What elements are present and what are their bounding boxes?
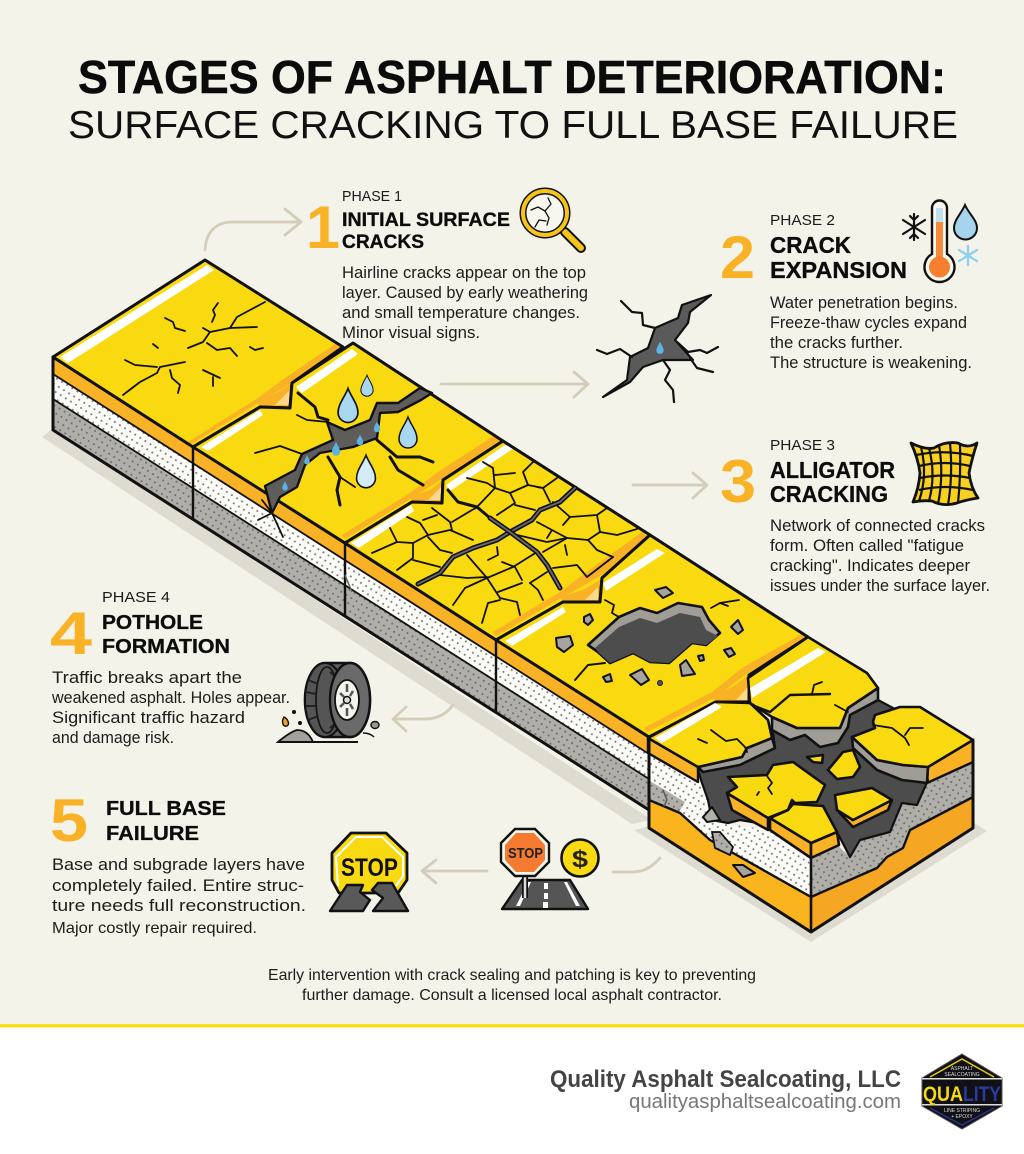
phase 5 text: Major costly repair required. <box>52 920 257 937</box>
phase 2 text <box>770 293 972 372</box>
logo: LINE STRIPING <box>944 1108 980 1114</box>
asphalt road cross-section illustration <box>42 260 987 942</box>
footer <box>0 1024 1024 1154</box>
phase 4 heading: POTHOLE <box>102 612 203 634</box>
title: SURFACE CRACKING TO FULL BASE FAILURE <box>68 104 958 147</box>
phase 4 heading <box>102 589 230 658</box>
phase 1 text: Hairline cracks appear on the top <box>342 263 586 282</box>
logo: LITY <box>963 1083 1001 1106</box>
stage 2 surface: wide crack with water <box>193 343 503 543</box>
icon: tire with debris <box>278 663 379 742</box>
phase 3 text: Network of connected cracks <box>770 516 985 535</box>
icon: cracked stop sign: STOP <box>341 854 398 882</box>
phase 4 text: Traffic breaks apart the <box>52 668 242 687</box>
phase 1 heading: INITIAL SURFACE <box>342 210 510 231</box>
title <box>68 51 958 147</box>
closing note: further damage. Consult a licensed local asphalt contractor. <box>302 987 722 1004</box>
exposed base <box>698 700 928 857</box>
phase 3 heading: CRACKING <box>770 481 888 507</box>
logo: ASPHALT <box>951 1066 973 1072</box>
phase 2 text: The structure is weakening. <box>770 353 972 372</box>
icon: stop sign, road and dollar coin: $ <box>572 846 589 873</box>
road shadow <box>42 428 987 942</box>
closing note: Early intervention with crack sealing and patching is key to preventing <box>268 967 756 984</box>
phase 1 text: and small temperature changes. <box>342 303 580 322</box>
number 5: 5 <box>50 787 88 854</box>
phase 2 heading: CRACK <box>770 232 851 258</box>
phase 1 text <box>342 263 588 342</box>
arrow: stage 2 to crack detail <box>441 372 588 397</box>
phase 2 heading <box>770 212 907 283</box>
phase 3 heading: PHASE 3 <box>770 437 835 454</box>
phase 2 text: Water penetration begins. <box>770 293 958 312</box>
icon: magnifying glass <box>523 191 581 248</box>
panel: phase 2 <box>720 201 977 372</box>
panel: phase 3 <box>720 437 990 595</box>
icon: water drops on surface <box>282 375 417 490</box>
phase 5 text <box>52 855 306 937</box>
phase 4 text: weakened asphalt. Holes appear. <box>51 688 290 707</box>
phase 4 text <box>51 668 290 747</box>
phase 2 heading: EXPANSION <box>770 257 907 283</box>
wide cracks <box>418 488 575 588</box>
icon: cracked stop sign <box>330 833 408 911</box>
phase 2 text: the cracks further. <box>770 333 903 352</box>
block faces <box>648 738 973 932</box>
phase 1 heading: PHASE 1 <box>342 188 402 205</box>
phase 2 heading: PHASE 2 <box>770 212 835 229</box>
arrow: block to cost icons <box>613 858 660 872</box>
arrow: stage 4 to phase 4 <box>393 705 453 731</box>
thin crack network <box>372 462 637 623</box>
title: STAGES OF ASPHALT DETERIORATION: <box>78 51 946 103</box>
pothole <box>575 600 739 680</box>
phase 1 text: Minor visual signs. <box>342 323 480 342</box>
phase 3 text: cracking". Indicates deeper <box>770 556 970 575</box>
phase 4 heading: PHASE 4 <box>102 589 170 606</box>
phase 5 text: ture needs full reconstruction. <box>52 896 306 915</box>
debris rocks <box>556 587 743 686</box>
panel: phase 1 <box>306 188 588 342</box>
closing note <box>268 967 756 1004</box>
logo: QUA <box>923 1083 963 1106</box>
phase 5 heading: FAILURE <box>106 823 199 845</box>
phase 2 text: Freeze-thaw cycles expand <box>770 313 967 332</box>
number 1: 1 <box>306 194 340 261</box>
stage 5 block: full base failure <box>648 637 973 932</box>
phase 4 heading: FORMATION <box>102 636 230 658</box>
phase 4 text: and damage risk. <box>52 728 174 747</box>
phase 3 heading <box>770 437 895 507</box>
website: qualityasphaltsealcoating.com <box>629 1091 901 1113</box>
phase 5 heading: FULL BASE <box>106 798 226 820</box>
phase 5 text: completely failed. Entire struc- <box>52 876 304 895</box>
number 4: 4 <box>50 600 93 667</box>
phase 5 text: Base and subgrade layers have <box>52 855 305 874</box>
logo <box>922 1054 1002 1129</box>
broken surface pieces <box>648 637 973 877</box>
phase 5 heading <box>106 798 226 845</box>
number 3: 3 <box>720 448 756 515</box>
number 2: 2 <box>720 224 755 291</box>
panel: phase 5 <box>50 787 306 937</box>
phase 4 text: Significant traffic hazard <box>52 708 245 727</box>
icon: stop sign, road and dollar coin: STOP <box>508 845 543 862</box>
phase 3 text <box>770 516 990 595</box>
stage 1 surface: hairline cracks <box>53 260 343 447</box>
logo: SEALCOATING <box>944 1072 980 1078</box>
phase 1 heading: CRACKS <box>342 232 424 253</box>
phase 1 heading <box>342 188 510 253</box>
arrow: stage 3 to phase 3 <box>633 473 707 498</box>
phase 3 text: form. Often called "fatigue <box>770 536 964 555</box>
phase 1 text: layer. Caused by early weathering <box>342 283 588 302</box>
logo: + EPOXY <box>951 1114 973 1120</box>
stage 3 surface: alligator cracking <box>345 441 650 640</box>
road side layers <box>53 357 649 810</box>
stage 4 surface: pothole with debris <box>496 535 808 737</box>
icon: alligator mesh <box>911 443 978 505</box>
icon: thermometer with snowflake and drop <box>903 201 977 282</box>
arrow: road to phase 1 <box>205 209 301 250</box>
panel: phase 4 <box>50 589 379 747</box>
phase 3 text: issues under the surface layer. <box>770 576 990 595</box>
icon: crack detail <box>597 295 718 402</box>
arrow: cost icons to stop icon <box>422 860 487 883</box>
icon: stop sign, road and dollar coin <box>501 829 598 909</box>
phase 3 heading: ALLIGATOR <box>770 457 895 483</box>
company name: Quality Asphalt Sealcoating, LLC <box>550 1066 901 1093</box>
